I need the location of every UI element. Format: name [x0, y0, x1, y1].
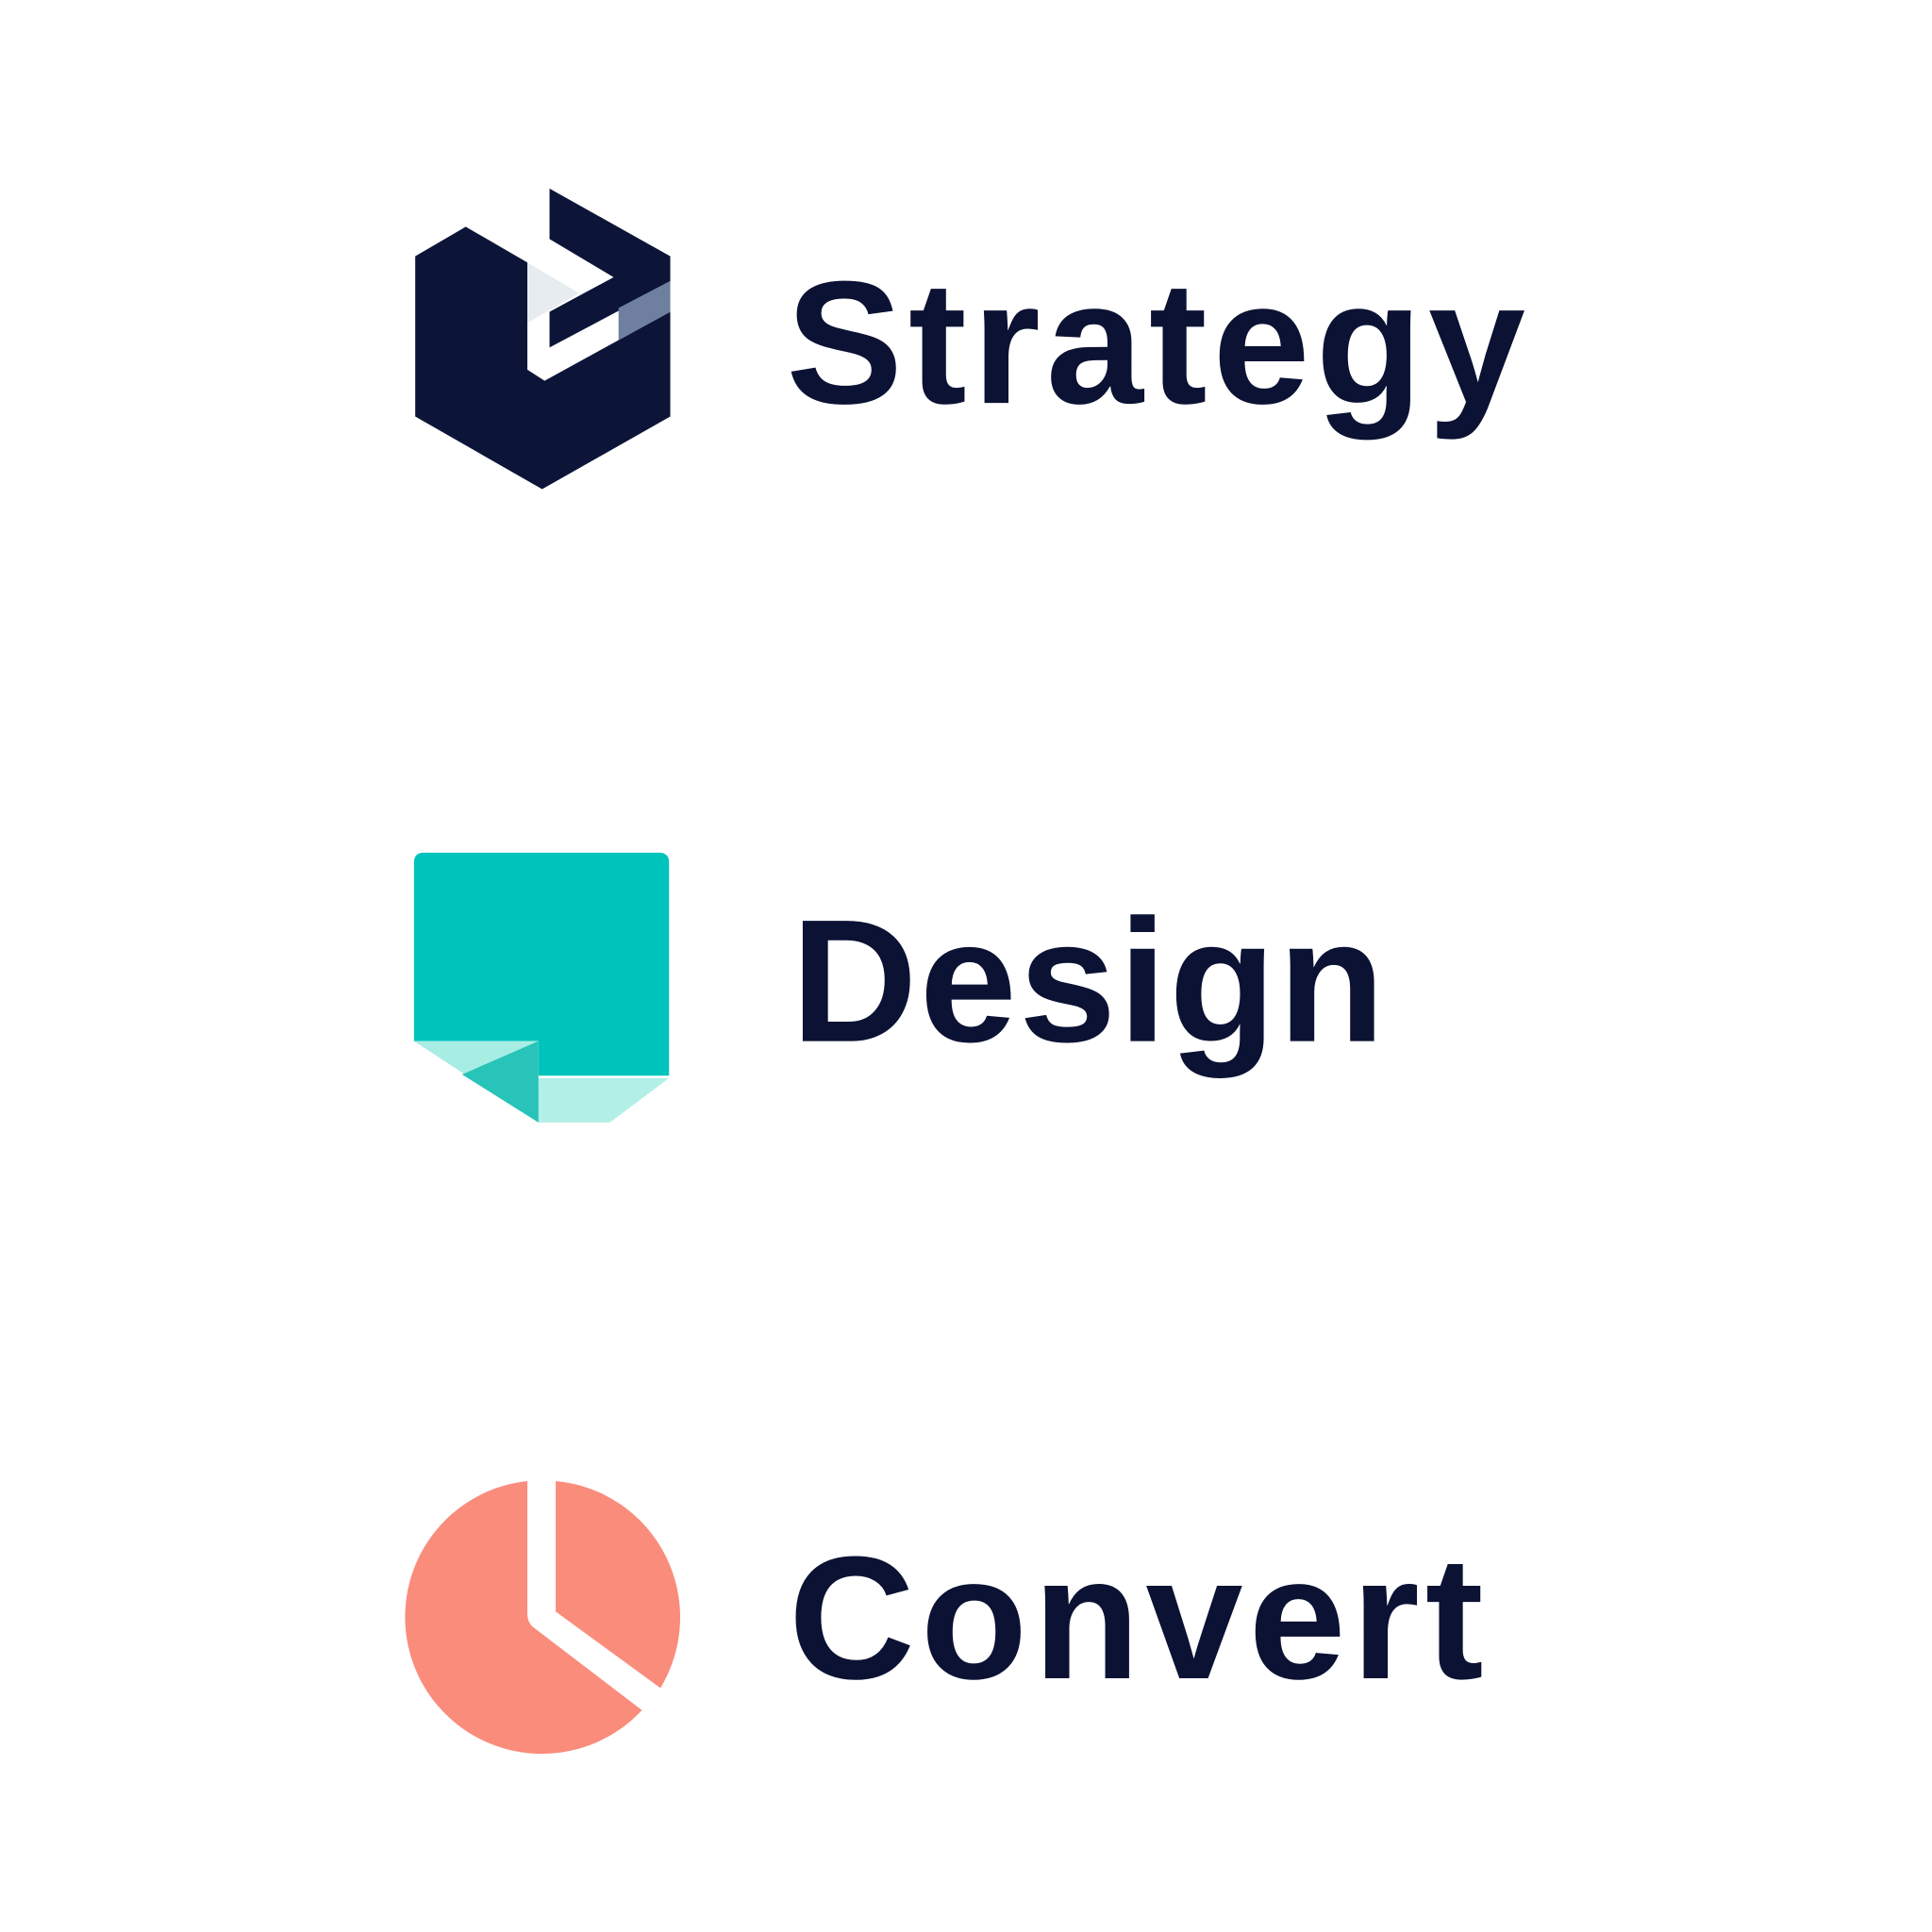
icon: pie chart: [405, 1481, 680, 1754]
heading: Convert: Convert: [789, 1521, 1484, 1716]
row: convert: [405, 1481, 1484, 1754]
icon: folded square: [414, 853, 669, 1123]
heading: Strategy: Strategy: [786, 245, 1525, 441]
heading: Design: Design: [791, 884, 1385, 1079]
row: strategy: [415, 189, 1525, 490]
icon: hexagon box: [415, 189, 671, 490]
row: design: [414, 853, 1385, 1123]
